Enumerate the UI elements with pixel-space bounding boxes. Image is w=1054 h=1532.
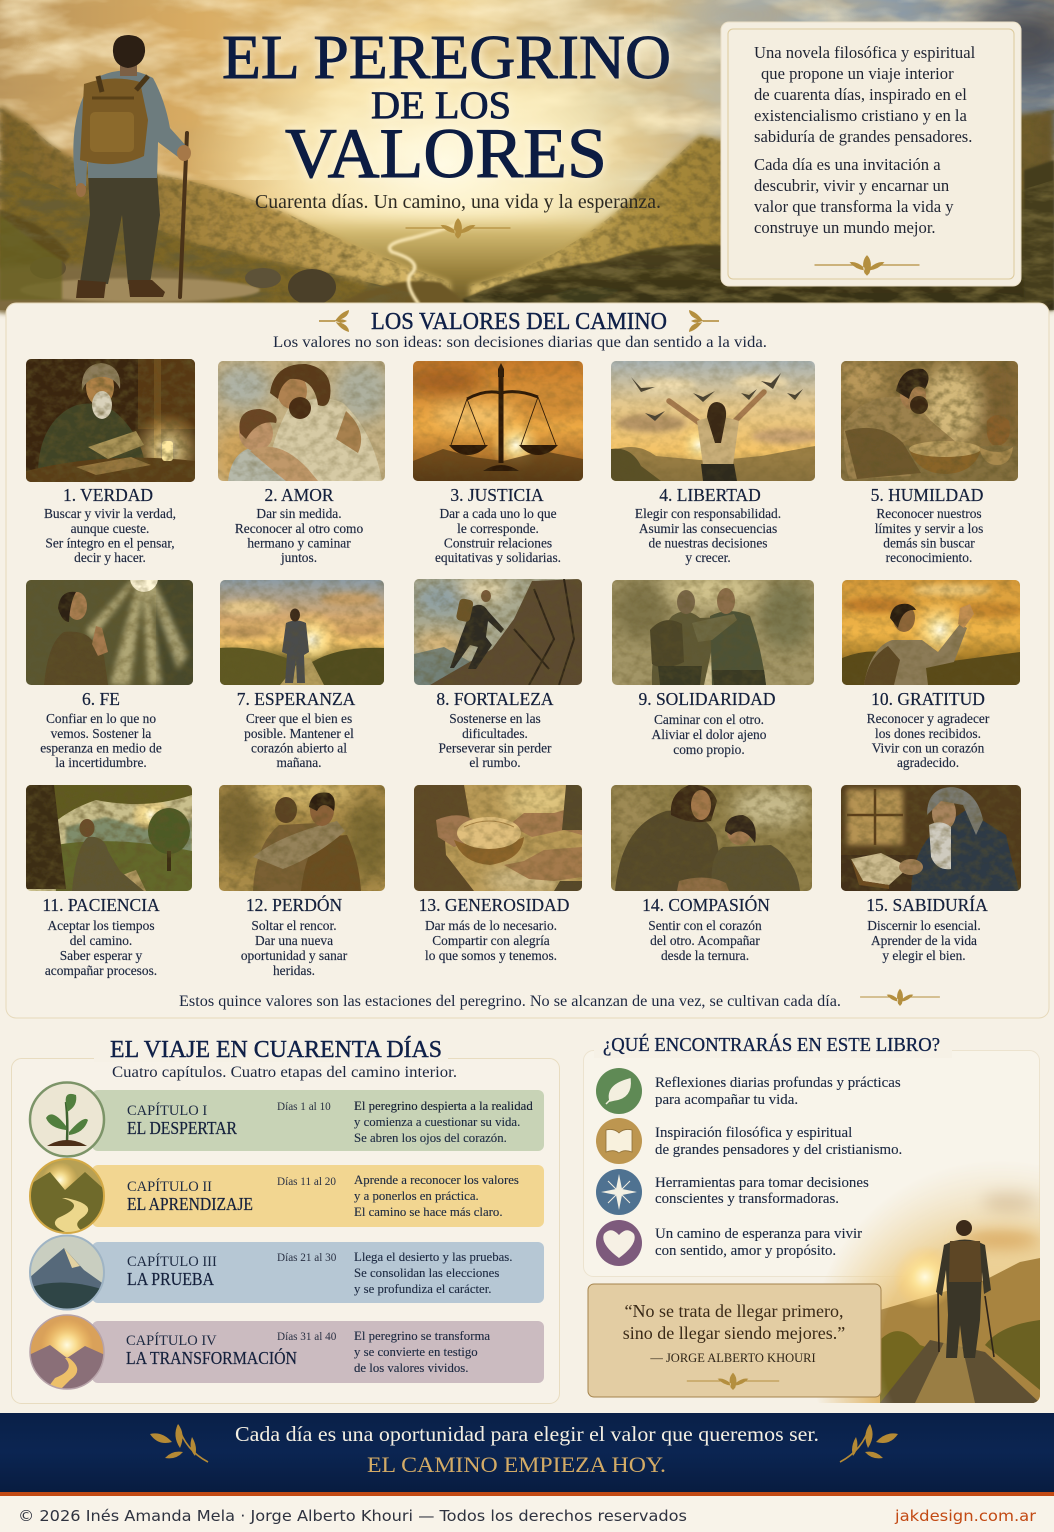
description: límites y servir a los [875, 521, 983, 536]
title: 1. VERDAD [63, 485, 153, 505]
description: vemos. Sostener la [51, 726, 151, 741]
description: agradecido. [897, 755, 959, 770]
days: Días 1 al 10 [277, 1101, 331, 1113]
values subheading: Los valores no son ideas: son decisiones diarias que dan sentido a la vida. [273, 334, 767, 351]
item 2 [596, 1118, 902, 1164]
title: 11. PACIENCIA [42, 895, 160, 915]
image: embrace [213, 361, 391, 486]
laurel left [150, 1424, 208, 1462]
hero ornament [406, 218, 510, 239]
description: Dar una nueva [255, 933, 333, 948]
bar [92, 1321, 544, 1383]
icon ring [30, 1236, 104, 1310]
card: 9 solidaridad [612, 575, 815, 757]
chapter name: LA PRUEBA [127, 1269, 214, 1289]
icon: leaf [596, 1068, 642, 1114]
values heading: LOS VALORES DEL CAMINO [371, 309, 667, 335]
chapter text: CAPÍTULO III [127, 1253, 217, 1270]
image: climber on rock [411, 579, 582, 685]
intro text: descubrir, vivir y encarnar un [754, 176, 950, 195]
title: 12. PERDÓN [246, 895, 342, 915]
closing ornament [860, 989, 940, 1006]
values heading ornament right [689, 310, 719, 332]
description: acompañar procesos. [45, 963, 157, 978]
image: thanks at sunrise [842, 580, 1027, 685]
card: 11 paciencia [26, 785, 192, 978]
image: open arms and birds [611, 361, 821, 481]
image: sage reading a book [841, 785, 1021, 891]
title: 4. LIBERTAD [659, 485, 761, 505]
item text: Reflexiones diarias profundas y prácticas [655, 1075, 901, 1091]
intro text: construye un mundo mejor. [754, 218, 936, 237]
card: 3 justicia [413, 361, 583, 566]
title: VALORES [285, 115, 607, 193]
description: el rumbo. [469, 755, 521, 770]
panel: journey in forty days [12, 1036, 560, 1404]
card: 2 amor [213, 361, 391, 565]
quote author: — JORGE ALBERTO KHOURI [649, 1351, 816, 1365]
journey subheading: Cuatro capítulos. Cuatro etapas del camino interior. [112, 1064, 457, 1081]
intro text: sabiduría de grandes pensadores. [754, 127, 972, 146]
description: Llega el desierto y las pruebas. [354, 1250, 512, 1264]
days: Días 11 al 20 [277, 1176, 336, 1188]
description: y se profundiza el carácter. [354, 1282, 492, 1296]
description: de los valores vividos. [354, 1361, 468, 1375]
intro ornament [814, 255, 920, 276]
laurel right [840, 1424, 898, 1462]
description: Dar más de lo necesario. [425, 918, 557, 933]
image: waiting under a tree [26, 785, 192, 891]
card: 7 esperanza [220, 580, 385, 770]
description: juntos. [280, 550, 317, 565]
description: esperanza en medio de [40, 740, 162, 756]
description: Se consolidan las elecciones [354, 1266, 499, 1280]
description: Asumir las consecuencias [639, 521, 777, 536]
description: Aprende a reconocer los valores [354, 1173, 519, 1187]
description: Confiar en lo que no [46, 711, 156, 726]
description: Vivir con un corazón [872, 740, 985, 756]
chapter text: CAPÍTULO II [127, 1178, 212, 1195]
closing line: Estos quince valores son las estaciones del peregrino. No se alcanzan de una vez, se cultivan cada día. [179, 993, 841, 1010]
title: 7. ESPERANZA [237, 689, 356, 709]
subtitle: Cuarenta días. Un camino, una vida y la esperanza. [255, 192, 661, 213]
journey heading: EL VIAJE EN CUARENTA DÍAS [110, 1037, 442, 1063]
description: lo que somos y tenemos. [425, 948, 557, 963]
card: 4 libertad [611, 361, 821, 565]
chapter 3 row [29, 1235, 544, 1311]
item text: Un camino de esperanza para vivir [655, 1226, 862, 1242]
description: Elegir con responsabilidad. [635, 506, 781, 521]
card: 14 compasion [606, 785, 812, 963]
icon: mountain [31, 1236, 103, 1308]
description: Se abren los ojos del corazón. [354, 1131, 507, 1145]
title: 6. FE [82, 689, 120, 709]
intro text: Una novela filosófica y espiritual [754, 43, 976, 62]
quote card [588, 1284, 881, 1397]
description: El camino se hace más claro. [354, 1205, 503, 1219]
icon ring [30, 1159, 104, 1233]
description: reconocimiento. [886, 550, 972, 565]
card: 12 perdon [219, 785, 385, 976]
description: la incertidumbre. [55, 755, 147, 770]
description: Dar a cada uno lo que [439, 506, 557, 521]
chapter name: LA TRANSFORMACIÓN [126, 1348, 297, 1368]
hero scene illustration [0, 0, 1054, 316]
title: 9. SOLIDARIDAD [638, 689, 776, 709]
description: Reconocer al otro como [235, 521, 363, 536]
item text: Herramientas para tomar decisiones [655, 1175, 869, 1191]
panel: what you will find [584, 1034, 1040, 1403]
description: Dar sin medida. [256, 506, 342, 521]
item text: de grandes pensadores y del cristianismo. [655, 1142, 902, 1158]
item text: con sentido, amor y propósito. [655, 1243, 836, 1259]
description: como propio. [673, 742, 745, 757]
intro text: existencialismo cristiano y en la [754, 106, 968, 125]
description: Discernir lo esencial. [867, 918, 981, 933]
hero pilgrim figure [73, 35, 191, 298]
banner call to action: EL CAMINO EMPIEZA HOY. [367, 1452, 666, 1477]
description: heridas. [273, 963, 315, 978]
card: 6 fe [26, 564, 193, 770]
item text: conscientes y transformadoras. [655, 1191, 839, 1207]
description: posible. Mantener el [244, 726, 354, 741]
description: equitativas y solidarias. [435, 550, 561, 565]
footer [0, 1496, 1054, 1532]
description: hermano y caminar [247, 536, 351, 550]
image: balance scale [413, 361, 583, 481]
description: Aceptar los tiempos [47, 918, 155, 933]
intro text: valor que transforma la vida y [754, 197, 954, 216]
icon: heart [596, 1220, 642, 1266]
icon: sprout [30, 1082, 104, 1156]
banner [0, 1413, 1054, 1496]
title: 14. COMPASIÓN [642, 895, 770, 915]
image: walker towards the sun [220, 580, 385, 685]
days: Días 21 al 30 [277, 1252, 337, 1264]
description: demás sin buscar [883, 536, 975, 550]
item 4 [596, 1220, 862, 1266]
bar [92, 1165, 544, 1227]
image: hands sharing bread [414, 782, 582, 894]
description: Buscar y vivir la verdad, [44, 506, 176, 521]
description: desde la ternura. [661, 948, 749, 963]
chapter 4 row [29, 1314, 544, 1390]
chapter text: CAPÍTULO I [127, 1102, 207, 1119]
description: y a ponerlos en práctica. [354, 1189, 479, 1203]
description: de nuestras decisiones [648, 536, 768, 550]
chapter name: EL DESPERTAR [127, 1118, 237, 1138]
description: Saber esperar y [60, 948, 143, 963]
description: Soltar el rencor. [251, 918, 337, 933]
days: Días 31 al 40 [277, 1331, 337, 1343]
image: reading elder by lantern [26, 359, 205, 488]
description: Creer que el bien es [246, 711, 352, 726]
icon: winding valley [31, 1160, 103, 1232]
description: aunque cueste. [71, 521, 149, 536]
chapter name: EL APRENDIZAJE [127, 1194, 253, 1214]
chapter 1 row [30, 1082, 544, 1156]
image: two walkers helping [612, 575, 815, 685]
description: El peregrino se transforma [354, 1329, 490, 1343]
bar [92, 1090, 544, 1151]
figure: walker [936, 1220, 994, 1358]
intro panel [721, 22, 1021, 286]
website: jakdesign.com.ar [894, 1507, 1037, 1525]
image: man comforting child [606, 785, 812, 891]
icon ring [30, 1315, 104, 1389]
bar [92, 1242, 544, 1303]
intro text: Cada día es una invitación a [754, 155, 941, 174]
description: Compartir con alegría [432, 933, 550, 948]
quote: “No se trata de llegar primero, [625, 1301, 843, 1321]
description: Construir relaciones [444, 536, 552, 550]
description: Sentir con el corazón [648, 918, 762, 933]
description: del otro. Acompañar [650, 933, 760, 948]
description: corazón abierto al [251, 740, 347, 756]
description: Reconocer nuestros [876, 506, 982, 521]
chapter 2 row [29, 1158, 544, 1234]
values heading ornament left [319, 310, 349, 332]
intro text: de cuarenta días, inspirado en el [754, 85, 967, 104]
description: Caminar con el otro. [654, 712, 764, 727]
title: 5. HUMILDAD [871, 485, 983, 505]
description: Sostenerse en las [449, 711, 541, 726]
description: Aliviar el dolor ajeno [652, 727, 767, 742]
description: y comienza a cuestionar su vida. [354, 1115, 520, 1129]
card: 1 verdad [26, 359, 205, 565]
title: 13. GENEROSIDAD [419, 895, 569, 915]
item 1 [596, 1068, 901, 1114]
description: Perseverar sin perder [438, 740, 552, 756]
description: y crecer. [685, 550, 731, 565]
image: forgiving embrace [219, 785, 385, 891]
title: 2. AMOR [264, 485, 334, 505]
title: 3. JUSTICIA [450, 485, 544, 505]
image: kneeling servant with basin [835, 361, 1018, 481]
card: 15 sabiduria [841, 785, 1021, 963]
description: le corresponde. [457, 521, 539, 536]
description: Aprender de la vida [871, 933, 977, 948]
description: El peregrino despierta a la realidad [354, 1099, 533, 1113]
item text: Inspiración filosófica y espiritual [655, 1125, 852, 1141]
chapter text: CAPÍTULO IV [126, 1332, 217, 1349]
description: del camino. [70, 933, 132, 948]
card: 10 gratitud [842, 580, 1027, 770]
card: 5 humildad [835, 361, 1018, 565]
intro text: que propone un viaje interior [761, 64, 954, 83]
icon: sunrise [29, 1314, 105, 1390]
quote: sino de llegar siendo mejores.” [623, 1323, 845, 1343]
title: 15. SABIDURÍA [866, 895, 988, 915]
description: y se convierte en testigo [354, 1345, 478, 1359]
description: decir y hacer. [74, 550, 146, 565]
icon: star [596, 1169, 642, 1215]
description: oportunidad y sanar [241, 948, 348, 963]
title [222, 24, 671, 193]
quote ornament [687, 1373, 779, 1390]
item 3 [596, 1169, 869, 1215]
description: Reconocer y agradecer [867, 711, 990, 726]
image: praying under light rays [26, 580, 193, 685]
item text: para acompañar tu vida. [655, 1092, 798, 1108]
heading: ¿QUÉ ENCONTRARÁS EN ESTE LIBRO? [603, 1034, 940, 1056]
description: y elegir el bien. [882, 948, 966, 963]
description: los dones recibidos. [875, 726, 981, 741]
card: 8 fortaleza [411, 579, 582, 770]
illustration: walker at sunset [820, 1172, 1040, 1403]
title: 10. GRATITUD [871, 689, 985, 709]
description: mañana. [277, 755, 321, 770]
title: DE LOS [371, 84, 511, 127]
copyright: © 2026 Inés Amanda Mela · Jorge Alberto Khouri — Todos los derechos reservados [18, 1507, 687, 1525]
description: Ser íntegro en el pensar, [45, 536, 175, 550]
title: 8. FORTALEZA [436, 689, 554, 709]
banner message: Cada día es una oportunidad para elegir el valor que queremos ser. [235, 1422, 819, 1446]
description: dificultades. [462, 726, 528, 741]
icon: book [596, 1118, 642, 1164]
card: 13 generosidad [414, 782, 582, 963]
panel: values of the way [6, 303, 1049, 1018]
title: EL PEREGRINO [222, 24, 671, 92]
